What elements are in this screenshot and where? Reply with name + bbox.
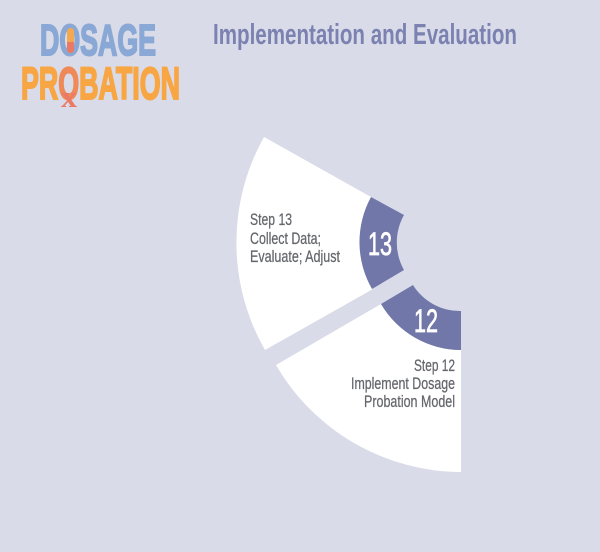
text: step 13 label: Evaluate; Adjust (250, 248, 340, 266)
number: 13: 13 (368, 226, 392, 262)
logo mark: Rx x: x (61, 79, 78, 114)
text: step 12 label: Step 12 (414, 357, 455, 375)
text: step 12 label: Implement Dosage (351, 375, 455, 393)
icon: capsule (67, 28, 74, 53)
band: step 13 number background (359, 197, 404, 289)
wedge: step 12 background (276, 304, 461, 472)
text: step 13 label: Step 13 (250, 211, 292, 229)
text: step 13 label: Collect Data; (250, 230, 321, 248)
band: step 12 number background (381, 285, 461, 350)
panel: step 12 (276, 285, 461, 472)
panel: step 13 (236, 137, 404, 350)
logo: Dosage Probation (21, 16, 180, 114)
text: step 12 label: Probation Model (364, 393, 455, 411)
wedge: step 13 background (236, 137, 373, 350)
logo word: DOSAGE: DOSAGE (40, 16, 156, 65)
logo word: PROBATION: PROBATION (21, 58, 180, 109)
number: 12: 12 (414, 303, 438, 339)
